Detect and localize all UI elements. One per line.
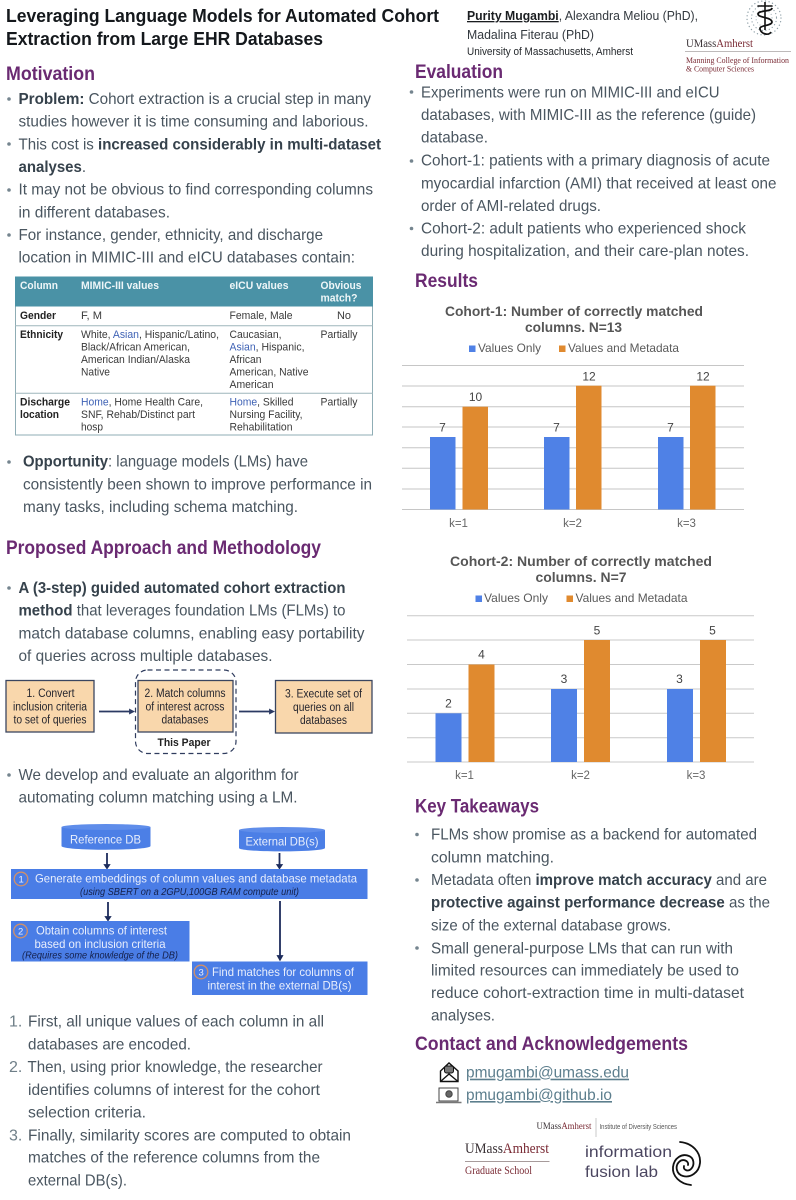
bars: k=2: 5 [594,624,601,638]
table row: ethnicity: African [230,354,262,366]
bars: k=3: k=3 [687,770,705,782]
table row: gender: Female, Male [230,310,292,322]
table row: discharge location: Home, Home Health Care, [81,397,203,409]
logo: UMass Amherst Manning College: & Computer Sciences [686,64,754,74]
step 3 box: 3. Execute set of [285,688,363,700]
table row: gender: F, M [81,310,102,322]
arrow: step 2 to step 3 [239,710,273,713]
logo: UMass Amherst Manning College [685,1,791,74]
text block: key takeaways bullets: column matching. [431,849,554,866]
numbered list: method steps: First, all unique values of each column in all [28,1014,324,1031]
step 2: obtain columns of interest: (Requires some knowledge of the DB) [22,950,178,962]
text block: motivation bullets: It may not be obvious to find corresponding columns [18,182,373,199]
authors and affiliation [467,8,698,58]
authors and affiliation: University of Massachusetts, Amherst [467,46,633,58]
chart title [445,303,703,335]
step 2 box: of interest across [146,701,225,713]
logo: UMass Graduate School: UMassAmherst [465,1141,550,1157]
chart legend: Values and Metadata [576,591,688,605]
table row: ethnicity: American [230,379,274,391]
table row: discharge location: location [20,409,59,421]
chart title: columns. N=13 [525,319,622,335]
table row: gender: No [337,310,351,322]
text block: key takeaways bullets: reduce cohort-extraction time in multi-dataset [431,985,745,1002]
text block: motivation bullets: Problem: Cohort extraction is a crucial step in many [18,91,371,108]
arrows from step 1 [106,901,282,960]
table header row: match? [320,293,358,305]
text block: opportunity: Opportunity: language models (LMs) have [23,454,308,471]
step 1: generate embeddings: Generate embeddings of column values and database metadata [35,872,357,886]
text block: motivation bullets: location in MIMIC-III and eICU databases contain: [18,250,355,267]
step 2: obtain columns of interest: based on inclusion criteria [34,937,166,951]
text block: evaluation bullets: order of AMI-related drugs. [421,198,601,215]
table row: ethnicity: Asian, Hispanic, [230,342,304,354]
step 3: find matches: Find matches for columns of [212,965,355,979]
bars: k=1 [436,648,494,782]
table header row: Column [20,280,58,292]
bars: k=1: 7 [439,420,446,434]
chart title [450,553,712,585]
table header row: MIMIC-III values [81,280,159,292]
bars: k=3: k=3 [677,518,696,530]
authors and affiliation: Madalina Fiterau (PhD) [467,27,594,42]
title [6,5,439,49]
bars: k=1: 4 [478,648,485,662]
table row: discharge location: hosp [81,422,103,434]
heading: Motivation: Motivation [6,64,95,85]
arrows from databases [105,853,282,868]
numbered list: method steps [9,1014,351,1190]
text block: key takeaways bullets [415,826,770,1025]
text block: evaluation bullets: Experiments were run on MIMIC-III and eICU [421,84,720,101]
step 2 box: 2. Match columns [144,688,226,700]
contact: website: pmugambi@github.io [466,1087,612,1104]
text block: motivation bullets: in different databases. [18,204,170,221]
text block: key takeaways bullets: FLMs show promise as a backend for automated [431,826,757,843]
heading: Contact and Acknowledgements: Contact and Acknowledgements [415,1034,688,1055]
text block: evaluation bullets: during hospitalization, and their care-plan notes. [421,243,749,260]
bars: k=2: k=2 [571,770,590,782]
table row: discharge location: SNF, Rehab/Distinct part [81,409,195,421]
text block: opportunity: consistently been shown to improve performance in [23,476,372,494]
step 2: obtain columns of interest [11,921,190,962]
step 1: generate embeddings: (using SBERT on a 2GPU,100GB RAM compute unit) [80,887,299,898]
icon: laptop [436,1088,462,1102]
arrow: step 1 to step 2 [99,710,133,713]
step 3 box [276,680,372,733]
text block: evaluation bullets: Cohort-1: patients with a primary diagnosis of acute [421,153,770,170]
text block: key takeaways bullets: Metadata often improve match accuracy and are [431,872,767,889]
step 3: find matches: 3 [198,968,204,978]
pipeline diagram [11,824,368,995]
database: External DB [239,827,325,851]
logo: UMass Amherst Manning College: Manning College of Information [686,55,790,65]
text block: method description: A (3-step) guided automated cohort extraction [18,580,346,597]
bars: k=3 [658,370,716,530]
step 2: obtain columns of interest: 2 [18,926,23,938]
text block: method description [7,580,364,665]
text block: key takeaways bullets: limited resources can immediately be used to [431,962,739,979]
table row: ethnicity: Black/African American, [81,342,190,354]
logo: UMass Graduate School: Graduate School [465,1163,533,1177]
logo: UMass Amherst Manning College: UMassAmherst [686,36,754,50]
numbered list: method steps: external DB(s). [28,1172,127,1190]
table row: discharge location: Nursing Facility, [230,409,302,421]
table row: discharge location: Rehabilitation [230,422,292,434]
text block: key takeaways bullets: Small general-purpose LMs that can run with [431,940,733,957]
text block: key takeaways bullets: size of the external database grows. [431,918,671,935]
text block: motivation bullets: studies however it is time consuming and laborious. [18,114,368,131]
step 1 box [6,680,94,732]
text block: opportunity: many tasks, including schema matching. [23,499,298,516]
numbered list: method steps: Finally, similarity scores are computed to obtain [28,1128,351,1144]
table row: discharge location: Discharge [20,397,70,409]
step 3 box: databases [300,715,347,727]
bars: k=1: k=1 [455,770,474,782]
text block: algorithm bullet: automating column matching using a LM. [18,790,298,807]
step 1: generate embeddings: 1 [18,874,24,886]
logo: UMass Institute of Diversity Sciences: UMassAmherst [536,1121,592,1131]
text block: evaluation bullets: database. [421,130,488,147]
table row: ethnicity: White, Asian, Hispanic/Latino, [81,329,219,341]
table row: gender: Gender [20,310,57,322]
text block: motivation bullets: For instance, gender, ethnicity, and discharge [18,227,323,244]
logo: UMass Graduate School [465,1141,550,1177]
step 3: find matches: interest in the external DB(s) [208,978,352,992]
this paper label: This Paper [158,737,211,749]
table row: ethnicity: American, Native [230,366,308,378]
step 1 box: to set of queries [14,714,87,726]
chart legend: Values Only [484,591,548,605]
bars: k=2 [544,370,602,530]
bars: k=2: 7 [553,420,560,434]
this paper dashed outline [136,670,236,754]
table row: ethnicity: American Indian/Alaska [81,354,191,366]
step 1 box: 1. Convert [26,688,75,700]
logo: information fusion lab [585,1142,700,1185]
table row: ethnicity: Caucasian, [230,329,282,341]
text block: evaluation bullets: myocardial infarction (AMI) that received at least one [421,175,777,192]
text block: method description: match database columns, enabling easy portability [18,626,364,642]
text block: motivation bullets [7,91,382,267]
numbered list: method steps: 3. [9,1128,22,1144]
bars: k=2: 12 [582,370,596,384]
flow diagram: three-step process [6,670,372,754]
numbered list: method steps: identifies columns of interest for the cohort [28,1082,321,1099]
contact: email: pmugambi@umass.edu [466,1065,629,1082]
numbered list: method steps: Then, using prior knowledge, the researcher [28,1059,323,1076]
bar chart: cohort-2 [407,553,754,782]
table header row: Obvious [320,280,362,292]
bars: k=2: 3 [561,672,568,686]
table: column value comparison [15,276,373,435]
step 3: find matches [192,962,368,995]
table row: ethnicity [20,329,358,391]
icon: envelope [440,1063,458,1082]
chart title: Cohort-1: Number of correctly matched [445,303,703,319]
step 1 box: inclusion criteria [13,701,88,713]
database: Reference DB: Reference DB [70,832,141,846]
text block: evaluation bullets: databases, with MIMIC-III as the reference (guide) [421,107,756,124]
chart title: Cohort-2: Number of correctly matched [450,553,712,569]
text block: algorithm bullet [7,767,299,807]
bars: k=3: 5 [709,624,716,638]
bars: k=2 [551,624,610,782]
heading: Evaluation: Evaluation [415,62,503,83]
chart legend [476,591,688,605]
logo: UMass Institute of Diversity Sciences: Institute of Diversity Sciences [600,1124,677,1131]
database: Reference DB [62,824,150,850]
bars: k=1 [430,390,488,530]
heading: Proposed Approach and Methodology: Proposed Approach and Methodology [6,538,321,559]
table row: ethnicity: Native [81,366,110,378]
table row: discharge location [20,397,358,434]
chart title: columns. N=7 [536,569,627,585]
logo: information fusion lab: information [585,1144,672,1161]
table header row: eICU values [230,280,288,292]
text block: key takeaways bullets: analyses. [431,1008,495,1025]
step 1: generate embeddings [11,869,368,899]
text block: evaluation bullets: Cohort-2: adult patients who experienced shock [421,220,747,237]
logo: UMass Institute of Diversity Sciences [536,1118,677,1137]
text block: method description: of queries across multiple databases. [18,648,272,665]
bars: k=3: 12 [696,370,710,384]
text block: evaluation bullets [410,84,777,260]
table header row [15,276,373,306]
numbered list: method steps: matches of the reference columns from the [28,1150,320,1166]
numbered list: method steps: 2. [9,1059,22,1076]
text block: motivation bullets: This cost is increased considerably in multi-dataset [18,136,382,153]
text block: key takeaways bullets: protective against performance decrease as the [431,895,770,912]
title: Leveraging Language Models for Automated Cohort [6,5,439,26]
numbered list: method steps: selection criteria. [28,1104,146,1122]
text block: algorithm bullet: We develop and evaluate an algorithm for [18,767,299,784]
table row: ethnicity: Ethnicity [20,329,64,341]
chart legend: Values Only [478,341,541,355]
numbered list: method steps: 1. [9,1014,22,1031]
chart legend: Values and Metadata [568,341,679,355]
bars: k=1: 10 [469,390,482,404]
bar chart: cohort-1 [402,303,744,530]
step 3 box: queries on all [293,702,354,714]
table row: discharge location: Partially [320,397,358,409]
bars: k=3 [667,624,726,782]
bars: k=3: 3 [676,672,683,686]
text block: opportunity [7,454,372,516]
bars: k=1: 2 [445,696,452,710]
table row: discharge location: Home, Skilled [230,397,294,409]
bars: k=1: k=1 [449,518,468,530]
heading: Key Takeaways: Key Takeaways [415,797,539,818]
title: Extraction from Large EHR Databases [6,28,323,49]
step 2: obtain columns of interest: Obtain columns of interest [36,924,168,938]
chart legend [469,341,679,355]
step 2 box: databases [162,714,209,726]
text block: method description: method that leverages foundation LMs (FLMs) to [18,603,346,620]
table row: gender [20,310,351,322]
logo: information fusion lab: fusion lab [585,1164,658,1181]
database: External DB: External DB(s) [246,834,318,848]
numbered list: method steps: databases are encoded. [28,1036,191,1054]
bars: k=2: k=2 [563,518,582,530]
step 2 box [138,680,233,732]
bars: k=3: 7 [667,420,674,434]
table row: ethnicity: Partially [320,329,358,341]
heading: Results: Results [415,271,478,292]
text block: motivation bullets: analyses. [18,159,86,176]
authors and affiliation: Purity Mugambi, Alexandra Meliou (PhD), [467,8,698,23]
